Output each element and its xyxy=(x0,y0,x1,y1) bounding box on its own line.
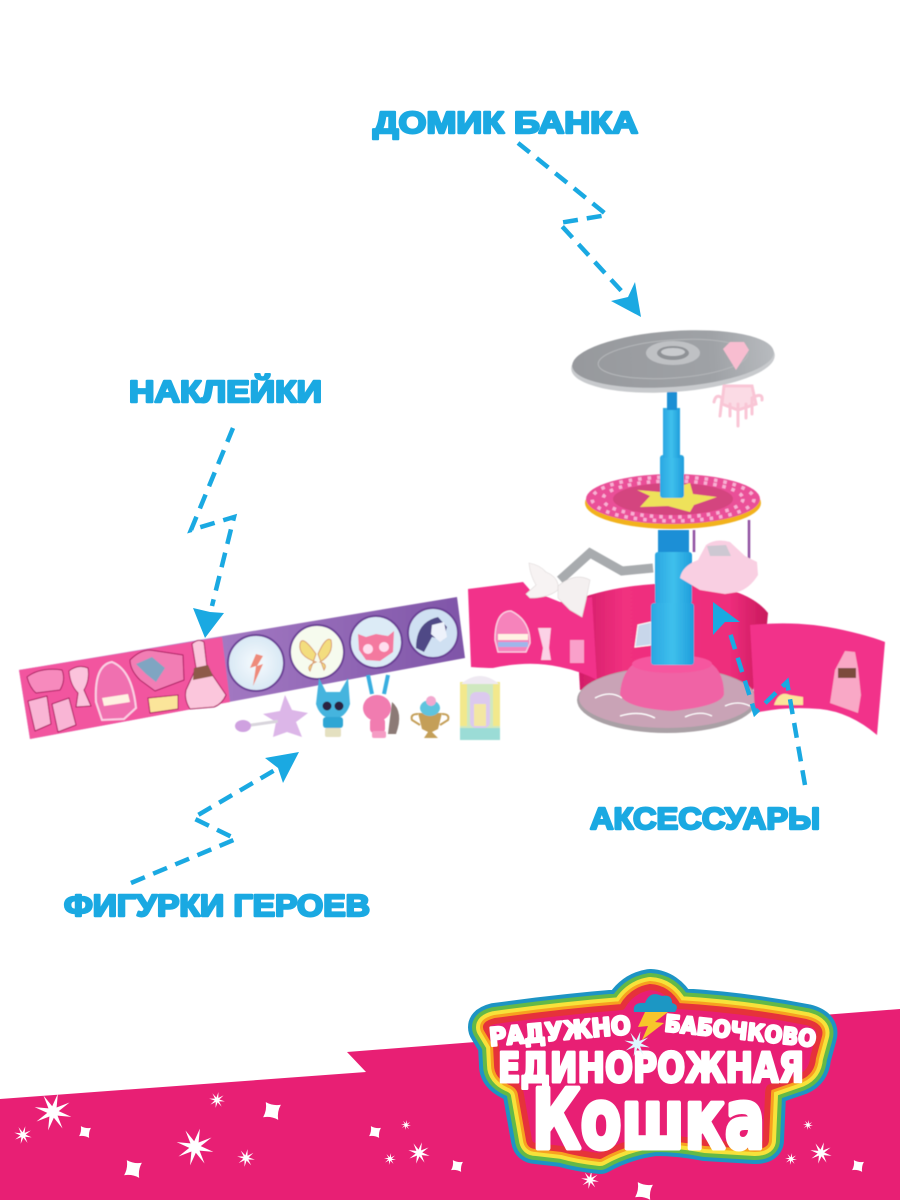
logo xyxy=(486,987,819,1168)
figure: pink cat xyxy=(363,675,399,738)
panel sticker: rainbow xyxy=(774,694,803,705)
figure: blue cat xyxy=(316,678,350,737)
label: accessories: АКСЕССУАРЫ xyxy=(590,801,820,836)
label: figures: ФИГУРКИ ГЕРОЕВ xyxy=(64,888,370,923)
sticker: teal poodle xyxy=(136,657,165,682)
disc: cat face xyxy=(350,616,402,668)
pink diamond xyxy=(723,342,749,370)
logo word: second line: ЕДИНОРОЖНАЯ xyxy=(498,1044,804,1092)
pole upper mid section xyxy=(663,408,680,458)
pole mid section xyxy=(655,552,692,604)
sticker: milkshake xyxy=(69,667,91,707)
sticker sheet xyxy=(19,597,465,739)
disc: unicorn xyxy=(408,608,458,658)
pink car xyxy=(680,541,758,594)
pastry cake band xyxy=(102,694,130,706)
pole bottom section xyxy=(651,603,694,665)
figure: booth xyxy=(460,676,500,740)
disc: lightning xyxy=(228,635,284,691)
middle platform xyxy=(585,474,761,529)
silver lid xyxy=(569,324,777,399)
figure: star guitar xyxy=(235,695,308,737)
sticker: cafe scene xyxy=(130,650,184,691)
arrow: house xyxy=(518,143,641,317)
pole top xyxy=(667,392,677,410)
disc: butterfly xyxy=(290,625,344,679)
right fold-out panel xyxy=(750,623,885,735)
car window xyxy=(707,545,731,556)
logo word: first left: РАДУЖНО xyxy=(488,1011,632,1052)
white rabbit xyxy=(526,563,558,598)
logo cloud and bolt xyxy=(621,994,677,1060)
panel sticker: milkshake xyxy=(538,628,551,660)
sticker: logo xyxy=(27,669,64,693)
silver arm xyxy=(560,553,653,580)
label: house: ДОМИК БАНКА xyxy=(373,105,638,140)
base disc markings xyxy=(595,694,750,718)
sticker: cake xyxy=(186,640,226,709)
panel sticker: cake xyxy=(830,651,861,713)
sticker: pastry case xyxy=(96,662,136,720)
pedestal skirt xyxy=(632,655,712,673)
sticker: small bench xyxy=(148,695,178,713)
panel sticker: bag xyxy=(570,640,584,663)
left fold-out panel xyxy=(468,582,597,680)
back wall xyxy=(575,583,768,690)
figure: trophy xyxy=(412,696,448,738)
arrow: figures xyxy=(131,752,299,883)
logo word: third line: Кошка xyxy=(532,1073,765,1168)
pink pedestal xyxy=(620,655,724,711)
chandelier xyxy=(714,386,762,426)
sticker: bags xyxy=(28,696,76,732)
base disc xyxy=(577,667,757,733)
shopping bag sticker xyxy=(635,622,651,647)
logo word: first right: БАБОЧКОВО xyxy=(663,1011,817,1053)
lower pole xyxy=(658,530,689,555)
label: stickers: НАКЛЕЙКИ xyxy=(129,373,322,409)
arrow: stickers xyxy=(191,428,234,638)
accessories arrow xyxy=(713,602,805,785)
pink banner with stars xyxy=(0,1009,900,1200)
toy bank house xyxy=(468,324,885,785)
pole upper thick section xyxy=(660,455,684,498)
figures row xyxy=(235,675,500,740)
panel sticker: pastry xyxy=(495,611,530,652)
rainbow outline xyxy=(486,987,819,1156)
sticker cake layers xyxy=(193,665,213,680)
swing ropes xyxy=(694,520,749,560)
white unicorn body xyxy=(558,577,590,617)
